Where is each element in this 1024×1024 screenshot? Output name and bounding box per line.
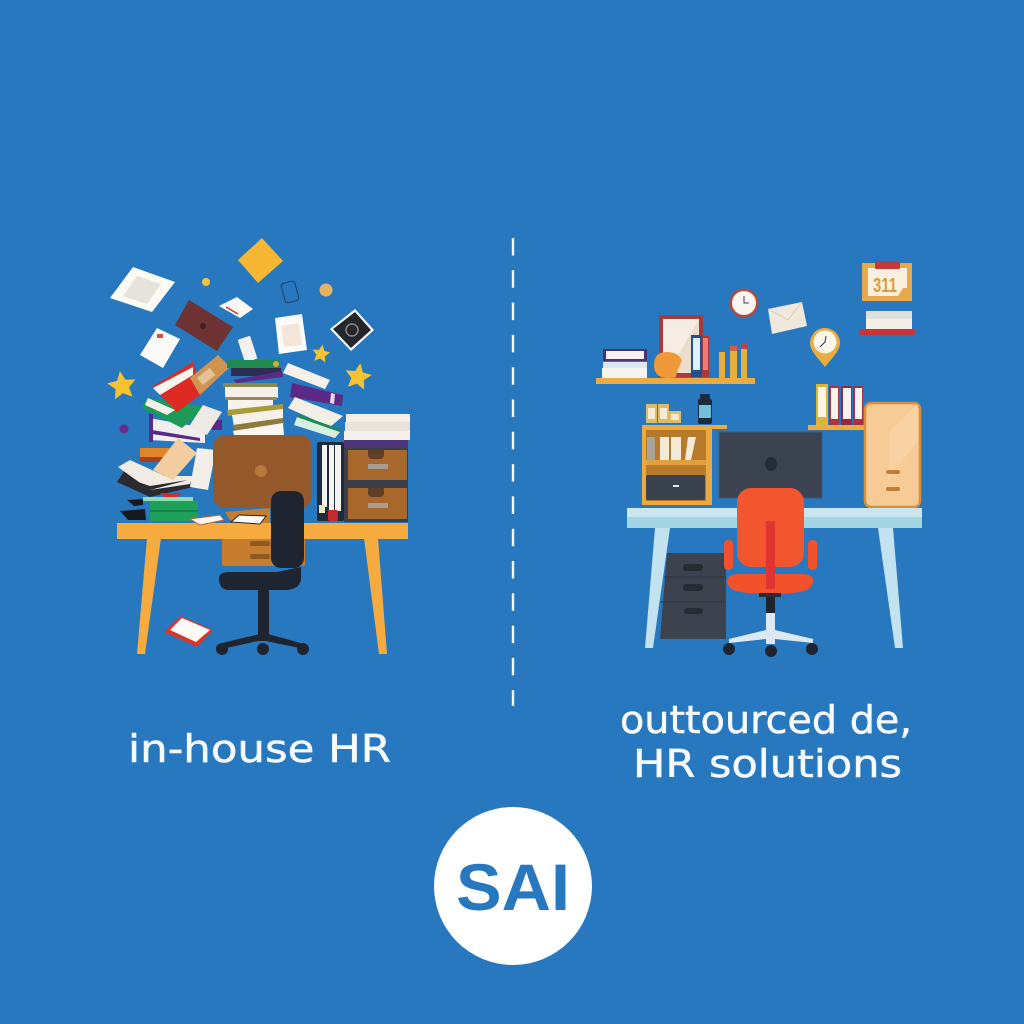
- logo badge SAI: SAI: [456, 850, 570, 924]
- black office chair: [216, 491, 309, 655]
- stars: [106, 343, 374, 400]
- caption: outsourced HR solutions: HR solutions: [633, 742, 902, 786]
- caption: in-house HR: in-house HR: [128, 727, 391, 771]
- shelf books: [602, 349, 647, 378]
- upper shelf: [596, 378, 755, 384]
- white desk: [627, 508, 922, 648]
- right tilted books: [283, 363, 343, 438]
- wall clock: [730, 288, 758, 318]
- envelope: [768, 302, 807, 334]
- logo badge SAI: [434, 807, 592, 965]
- monitor: [719, 432, 822, 498]
- monitor back: [213, 435, 312, 523]
- small card: [219, 297, 253, 318]
- filing cabinet: [660, 553, 726, 639]
- dashed divider: [512, 238, 514, 706]
- middle book stack: [223, 336, 285, 447]
- brown envelope: [175, 300, 233, 351]
- black diamond picture: [330, 309, 374, 351]
- floating document: [275, 314, 307, 354]
- binders: [317, 442, 344, 521]
- box on red shelf: [859, 311, 915, 335]
- shelf binders: [691, 335, 709, 377]
- fallen book: [164, 616, 213, 647]
- calendar: 311: [873, 275, 897, 297]
- panel: outsourced HR tidy desk: [596, 261, 922, 657]
- floating diamond: [238, 238, 283, 283]
- red office chair: [723, 488, 818, 657]
- orange pouch: [654, 352, 682, 378]
- caption: outsourced HR solutions: [620, 698, 912, 786]
- desk: [117, 523, 408, 654]
- picture frame: [659, 315, 703, 377]
- computer tower: [865, 403, 920, 507]
- caption: outsourced HR solutions: outtourced de,: [620, 698, 912, 742]
- dots and phone: [120, 278, 332, 434]
- calendar: [862, 261, 912, 301]
- floating paper with table: [110, 267, 175, 312]
- panel: in-house HR messy desk: [106, 238, 410, 655]
- papers on desk: [190, 515, 266, 525]
- cabinet: [642, 425, 727, 505]
- clock location pin: [810, 328, 840, 367]
- white note: [140, 328, 180, 368]
- bottle and jars: [646, 394, 712, 424]
- fanned books and paper at left: [117, 355, 230, 521]
- pencils: [719, 343, 747, 378]
- right small shelf with binders: [808, 384, 866, 430]
- flat white stack and drawers: [344, 414, 410, 522]
